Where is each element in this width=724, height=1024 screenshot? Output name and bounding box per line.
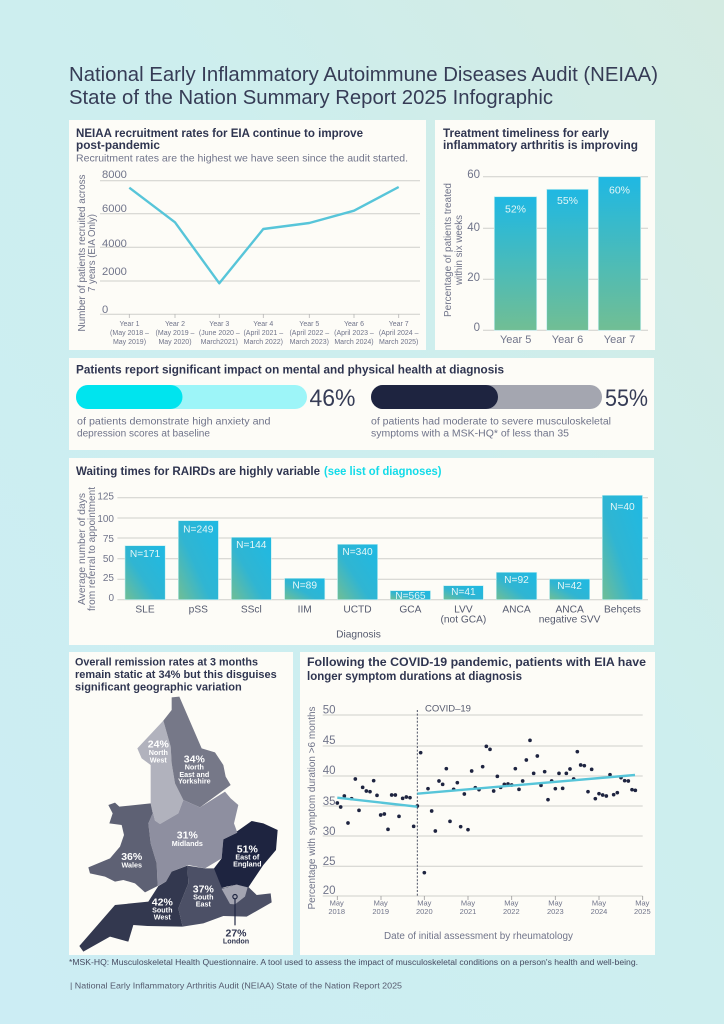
panel: recruitment rates [69,120,426,350]
bar chart: waiting times: N=565 [395,591,426,602]
scatter chart: symptom duration over time: 2018 [328,907,345,916]
heading: remission rates: Overall remission rates at 3 months [75,657,258,669]
bar chart: treated within six weeks: Year 5 [500,334,531,346]
label: South East 37%: South [193,893,213,902]
label: Midlands 31%: Midlands [172,839,203,848]
label: East of England 51%: East of [235,852,260,862]
line chart: recruitment: Year 5 [299,321,319,328]
scatter chart: symptom duration over time: 50 [323,704,335,716]
label: Wales 36%: Wales [121,860,142,869]
line chart: recruitment: 8000 [102,169,127,181]
label: North East and Yorkshire 34%: 34% [184,753,205,765]
label: Midlands 31%: 31% [177,830,198,842]
label: South East 37%: East [196,900,211,909]
label: South West 42%: 42% [152,897,173,909]
bar chart: treated within six weeks: 60% [609,184,630,196]
bar chart: waiting times: SLE [135,605,155,616]
progress bar: 46% anxiety and depression: 46% [310,385,356,412]
label: South East 37% [193,883,214,909]
scatter chart: symptom duration over time: May [374,898,388,908]
label: South West 42%: West [154,913,171,922]
bar chart: waiting times: N=92 [504,575,529,586]
scatter chart: symptom duration over time: May [504,898,519,908]
label: London 27% [223,928,249,946]
heading: symptom durations: Following the COVID-19 pandemic, patients with EIA have [307,657,646,669]
bar chart: waiting times [76,487,648,640]
label: North East and Yorkshire 34% [178,753,211,786]
bar chart: waiting times: 0 [108,593,114,604]
bar chart: waiting times: 125 [97,492,114,502]
label: East of England 51% [233,844,261,869]
line chart: recruitment [76,169,420,346]
scatter chart: symptom duration over time: 20 [323,885,335,897]
label: North East and Yorkshire 34%: North [185,763,204,772]
label: South East 37%: 37% [193,883,214,895]
subheading: Recruitment rates are the highest we have seen since the audit started. [76,152,408,164]
bar chart: waiting times: SScl [241,605,262,616]
bar chart: treated within six weeks: 40 [467,222,480,234]
scatter chart: symptom duration over time: May [592,898,606,908]
heading: recruitment rates: post-pandemic [76,140,161,152]
line chart: recruitment: May 2020) [158,339,192,346]
bar chart: waiting times: 100 [97,514,114,525]
heading: treatment timeliness: Treatment timeliness for early [443,128,610,140]
scatter chart: symptom duration over time: May [417,898,432,908]
scatter chart: symptom duration over time: 25 [323,856,335,868]
heading: waiting times [76,466,442,478]
line chart: recruitment: March 2024) [334,339,374,346]
bar chart: waiting times: 75 [103,534,114,545]
bar chart: treated within six weeks: 60 [467,169,480,181]
map: regions of England and Wales [79,697,278,952]
heading: health impact: Patients report significant impact on mental and physical health at diagnosis [76,364,504,376]
title [69,64,658,109]
scatter chart: symptom duration over time: 45 [323,735,335,747]
line chart: recruitment: (May 2019 – [156,330,195,337]
label: North East and Yorkshire 34%: East and [179,770,209,779]
progress bar: 55% musculoskeletal symptoms: of patients had moderate to severe musculoskeletal [371,416,611,428]
bar chart: treated within six weeks: Year 7 [604,334,635,346]
panel: mental and physical health impact [69,358,654,450]
bar chart: treated within six weeks: 55% [557,195,578,207]
progress bar: 46% anxiety and depression: of patients demonstrate high anxiety and [77,416,270,428]
label: North West 24%: West [150,755,167,764]
scatter chart: symptom duration over time: COVID–19 [425,703,471,714]
bar chart: waiting times: negative SVV [539,615,601,626]
line chart: recruitment: 7 years (EIA Only) [86,214,98,292]
line chart: recruitment: Year 1 [120,321,140,328]
line chart: recruitment: (April 2023 – [334,330,374,337]
line chart: recruitment: May 2019) [113,339,146,346]
label: Wales 36% [121,851,143,869]
scatter chart: symptom duration over time: May [548,898,563,908]
bar chart: treated within six weeks: 52% [505,204,526,216]
progress bar: 55% musculoskeletal symptoms: 55% [605,385,648,412]
scatter chart: symptom duration over time: 2024 [591,907,607,916]
scatter chart: symptom duration over time: 2021 [460,907,476,916]
line chart: recruitment: 2000 [102,266,127,278]
bar chart: waiting times: IIM [298,605,312,616]
heading: symptom durations [307,657,646,683]
scatter chart: symptom duration over time: 2023 [547,907,564,916]
line chart: recruitment: 0 [102,304,108,316]
bar chart: waiting times: N=144 [236,540,267,551]
scatter chart: symptom duration over time: Date of initial assessment by rheumatology [384,931,573,942]
bar chart: waiting times: ANCA [502,605,531,616]
bar chart: waiting times: N=41 [451,587,476,598]
bar chart: waiting times: N=249 [183,525,214,536]
scatter chart: symptom duration over time [307,703,651,942]
bar chart: treated within six weeks [442,169,648,346]
line chart: recruitment: (April 2024 – [379,330,419,337]
bar chart: waiting times: 50 [103,554,114,565]
bar chart: waiting times: Diagnosis [336,629,381,640]
scatter chart: symptom duration over time: 2019 [372,907,389,916]
bar chart: waiting times: UCTD [343,605,372,616]
label: South West 42% [152,897,173,922]
line chart: recruitment: March 2022) [244,339,283,346]
progress bar: 55% musculoskeletal symptoms [371,385,648,440]
scatter chart: symptom duration over time: 30 [323,826,335,838]
bar chart: waiting times: N=171 [130,549,160,560]
panel: remission rates map [69,652,293,955]
bar chart: treated within six weeks: Year 6 [552,334,583,346]
heading: recruitment rates: NEIAA recruitment rates for EIA continue to improve [76,128,363,140]
scatter chart: symptom duration over time: Percentage with symptom duration >6 months [307,706,318,910]
heading: treatment timeliness [443,128,638,152]
footnote: *MSK-HQ: Musculoskeletal Health Questionnaire. A tool used to assess the impact of musculoskeletal conditions on a person's health and well-being. [69,958,638,967]
line chart: recruitment: Year 3 [209,321,229,328]
scatter chart: symptom duration over time: 2022 [503,907,520,916]
label: North West 24%: North [149,748,168,757]
line chart: recruitment: March 2023) [290,339,329,346]
title: State of the Nation Summary Report 2025 Infographic [69,87,553,109]
scatter chart: symptom duration over time: 2025 [634,907,651,916]
bar chart: waiting times: pSS [189,605,208,616]
panel: treatment timeliness [435,120,655,350]
line chart: recruitment: (May 2018 – [110,330,149,337]
line chart: recruitment: (April 2021 – [243,330,283,337]
heading: remission rates: significant geographic variation [75,681,242,693]
line chart: recruitment: (April 2022 – [289,330,329,337]
bar chart: waiting times: N=42 [557,581,582,592]
bar chart: waiting times: (not GCA) [440,615,486,626]
heading: symptom durations: longer symptom durations at diagnosis [307,671,522,683]
label: East of England 51%: 51% [237,844,258,856]
label: Midlands 31% [172,830,203,848]
line chart: recruitment: Year 4 [253,321,273,328]
line chart: recruitment: Number of patients recruited across [76,174,88,332]
bar chart: waiting times: N=340 [342,547,373,558]
heading: recruitment rates [76,128,363,152]
line chart: recruitment: March2021) [201,339,238,346]
progress bar: 46% anxiety and depression: depression scores at baseline [77,428,210,440]
bar chart: treated within six weeks: within six weeks [453,215,465,286]
heading: waiting times: (see list of diagnoses) [324,466,442,478]
bar chart: treated within six weeks: Percentage of patients treated [442,183,454,317]
line chart: recruitment: Year 2 [165,321,185,328]
scatter chart: symptom duration over time: 40 [323,765,335,777]
title: National Early Inflammatory Autoimmune Diseases Audit (NEIAA) [69,64,658,86]
scatter chart: symptom duration over time: May [635,898,650,908]
label: East of England 51%: England [233,860,261,869]
label: London 27%: London [223,936,249,946]
line chart: recruitment: (June 2020 – [199,330,240,337]
bar chart: waiting times: GCA [399,605,422,616]
panel: symptom durations [300,652,655,955]
scatter chart: symptom duration over time: May [330,898,344,908]
panel: waiting times for RAIRDs [69,458,654,645]
line chart: recruitment: March 2025) [379,339,418,346]
line chart: recruitment: Year 6 [344,321,364,328]
bar chart: waiting times: N=89 [292,580,317,591]
bar chart: waiting times: 25 [103,573,114,584]
bar chart: waiting times: from referral to appointment [86,487,98,611]
label: North East and Yorkshire 34%: Yorkshire [178,776,211,786]
heading: treatment timeliness: inflammatory arthritis is improving [443,140,638,152]
bar chart: waiting times: Average number of days [76,493,88,605]
scatter chart: symptom duration over time: 2020 [416,907,433,916]
line chart: recruitment: Year 7 [389,321,409,328]
scatter chart: symptom duration over time: May [461,898,475,908]
source line: | National Early Inflammatory Arthritis Audit (NEIAA) State of the Nation Report 2025 [70,980,402,990]
bar chart: treated within six weeks: 20 [467,272,480,284]
bar chart: waiting times: Behçets [604,605,641,616]
progress bar: 46% anxiety and depression [76,385,356,440]
line chart: recruitment: 4000 [102,238,127,250]
line chart: recruitment: 6000 [102,203,127,215]
heading: remission rates [75,657,277,693]
bar chart: waiting times: LVV [454,605,473,616]
label: London 27%: 27% [225,928,247,940]
heading: waiting times: Waiting times for RAIRDs are highly variable [76,466,320,478]
label: South West 42%: South [152,906,172,915]
label: North West 24%: 24% [148,739,169,751]
heading: remission rates: remain static at 34% but this disguises [75,669,277,681]
bar chart: waiting times: N=40 [610,502,635,513]
progress bar: 55% musculoskeletal symptoms: symptoms with a MSK-HQ* of less than 35 [371,428,569,440]
scatter chart: symptom duration over time: 35 [323,796,335,808]
bar chart: treated within six weeks: 0 [474,322,480,334]
label: North West 24% [148,739,169,764]
bar chart: waiting times: ANCA [555,605,584,616]
label: Wales 36%: 36% [121,851,143,863]
